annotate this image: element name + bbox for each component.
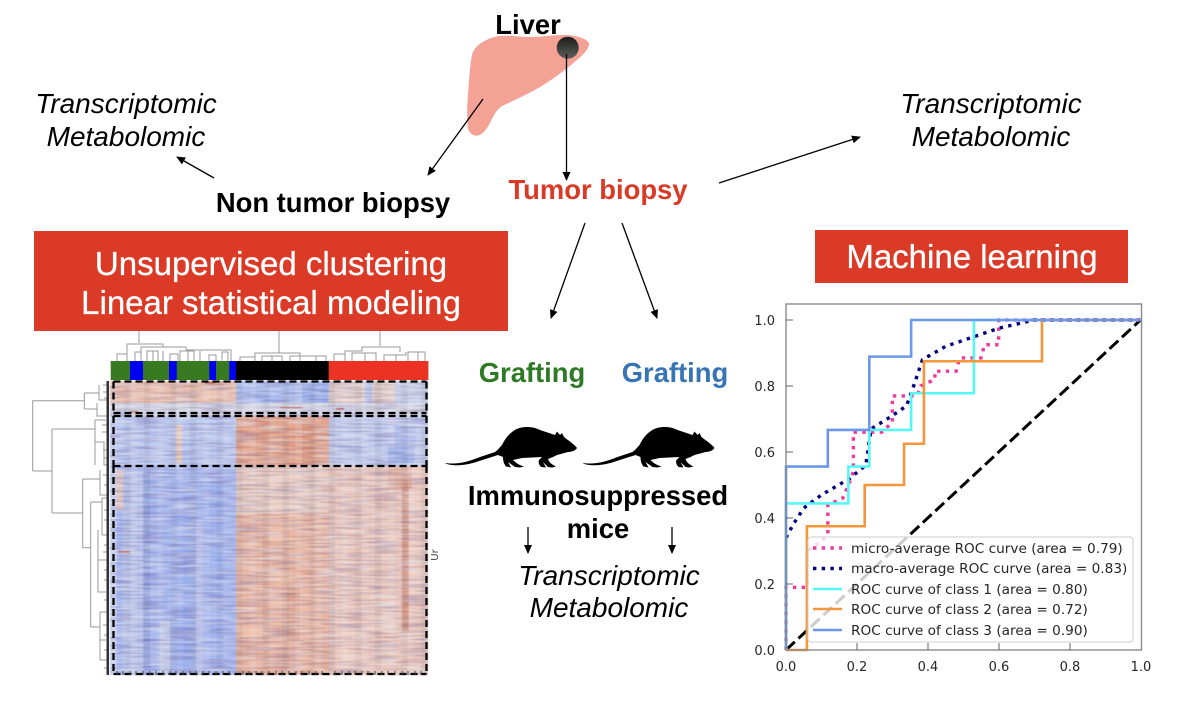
arrow: to right omics xyxy=(719,137,860,183)
arrow: left mouse down xyxy=(527,527,529,553)
x axis labels: 0.8 xyxy=(1060,660,1080,675)
icon: mouse right xyxy=(582,427,714,468)
arrow: liver to non tumor biopsy xyxy=(428,99,483,175)
x axis labels: 1.0 xyxy=(1131,660,1151,675)
text: transcriptomic metabolomic, left xyxy=(35,88,217,152)
text: transcriptomic metabolomic, right: Transcriptomic xyxy=(900,88,1082,119)
grafting label blue: Grafting xyxy=(622,357,728,388)
macro-average curve xyxy=(786,320,1140,538)
text: transcriptomic metabolomic, center xyxy=(518,560,700,623)
text: transcriptomic metabolomic, center: Metabolomic xyxy=(530,592,688,623)
arrow: right mouse down xyxy=(671,527,673,553)
legend: macro-average ROC curve (area = 0.83) xyxy=(851,561,1127,577)
tumor biopsy label: Tumor biopsy xyxy=(508,174,688,205)
arrow: to left omics xyxy=(177,157,214,178)
plot curves xyxy=(786,320,1140,650)
heatmap cells xyxy=(110,381,428,675)
banner: machine learning: Machine learning xyxy=(846,238,1098,275)
diagonal chance line xyxy=(786,320,1140,650)
ROC chart xyxy=(754,304,1151,675)
column tick marks xyxy=(117,671,421,675)
x axis labels xyxy=(776,660,1151,675)
text: transcriptomic metabolomic, left: Metabolomic xyxy=(47,121,205,152)
y axis labels: 0.0 xyxy=(754,644,775,659)
sample color bar xyxy=(111,361,428,380)
x axis labels: 0.0 xyxy=(776,660,796,675)
banner: machine learning xyxy=(815,230,1128,283)
text: transcriptomic metabolomic, right xyxy=(900,88,1082,152)
y axis labels: 0.2 xyxy=(754,578,775,593)
text: transcriptomic metabolomic, left: Transcriptomic xyxy=(35,88,217,119)
class 3 curve xyxy=(786,320,1140,650)
banner: clustering: Unsupervised clustering xyxy=(95,245,447,282)
immunosuppressed mice label: mice xyxy=(567,513,629,544)
x axis labels: 0.2 xyxy=(847,660,867,675)
class 1 curve xyxy=(786,320,1140,650)
text: transcriptomic metabolomic, center: Transcriptomic xyxy=(518,560,700,591)
cluster dashed boxes xyxy=(114,382,426,674)
liver heading: Liver xyxy=(495,9,561,40)
legend: micro-average ROC curve (area = 0.79) xyxy=(851,541,1123,557)
arrow: tumor biopsy to left graft xyxy=(551,223,585,318)
y axis labels: 0.8 xyxy=(754,380,775,395)
dense dendrogram leaves xyxy=(106,381,109,675)
immunosuppressed mice label: Immunosuppressed xyxy=(468,480,728,511)
banner: clustering xyxy=(34,231,508,331)
axis label: Ur xyxy=(430,548,441,561)
arrow: tumor biopsy to right graft xyxy=(622,223,657,318)
legend: ROC curve of class 1 (area = 0.80) xyxy=(851,582,1088,598)
text: transcriptomic metabolomic, right: Metabolomic xyxy=(912,121,1070,152)
y axis labels: 1.0 xyxy=(754,314,775,329)
tick marks xyxy=(786,320,1070,650)
x axis labels: 0.6 xyxy=(989,660,1009,675)
x axis labels: 0.4 xyxy=(918,660,938,675)
heatmap panel xyxy=(33,331,441,675)
legend xyxy=(808,537,1133,642)
banner: clustering: Linear statistical modeling xyxy=(81,284,461,321)
y axis labels: 0.6 xyxy=(754,446,775,461)
grafting label green: Grafting xyxy=(479,357,585,388)
axes frame xyxy=(786,304,1142,650)
immunosuppressed mice label xyxy=(468,480,728,544)
icon: mouse left xyxy=(445,427,577,468)
non tumor biopsy label: Non tumor biopsy xyxy=(216,187,451,218)
legend: ROC curve of class 3 (area = 0.90) xyxy=(851,623,1088,639)
arrow: tumor to tumor biopsy xyxy=(566,54,568,180)
micro-average curve xyxy=(786,320,1140,650)
y axis labels: 0.4 xyxy=(754,512,775,527)
icon: liver with tumor xyxy=(467,35,589,136)
legend: ROC curve of class 2 (area = 0.72) xyxy=(851,602,1088,618)
class 2 curve xyxy=(786,320,1140,650)
row dendrogram xyxy=(33,385,108,668)
y axis labels xyxy=(754,314,775,659)
column dendrogram xyxy=(117,331,425,361)
